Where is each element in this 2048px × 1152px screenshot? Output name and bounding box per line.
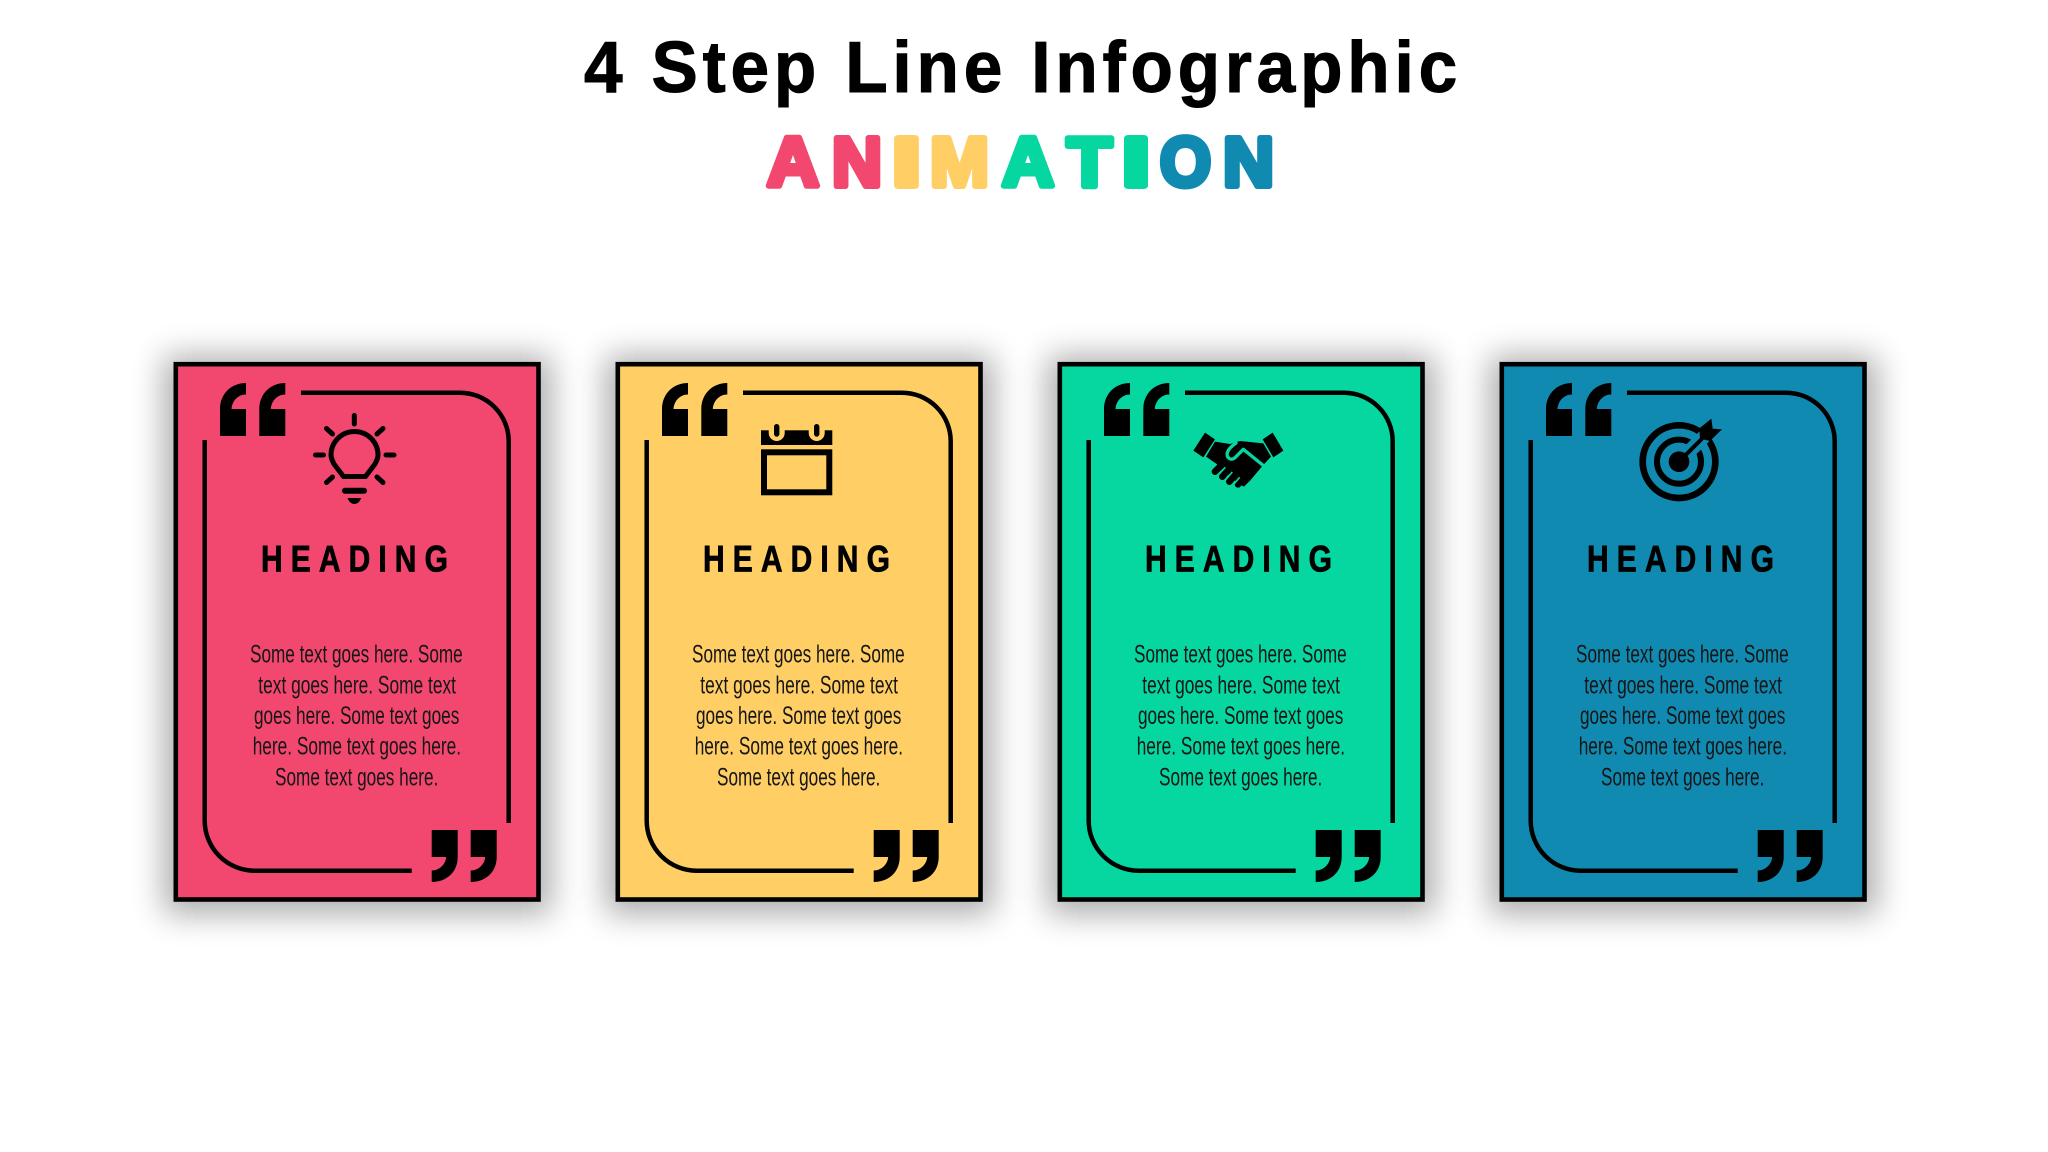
body text: Some text goes here. Some (1134, 641, 1347, 669)
body text: here. Some text goes here. (695, 733, 903, 761)
subtitle: animation (767, 123, 1274, 201)
body text (1576, 641, 1789, 792)
subtitle: animation: A (1002, 123, 1054, 201)
body text: Some text goes here. (275, 764, 438, 792)
body text: text goes here. Some text (1142, 671, 1340, 699)
body text: Some text goes here. Some (692, 641, 905, 669)
icon: opening quote (1546, 383, 1611, 436)
body text: text goes here. Some text (700, 671, 898, 699)
body text: Some text goes here. Some (1576, 641, 1789, 669)
panel: step 2 yellow (606, 356, 993, 914)
heading: HEADING (1145, 538, 1340, 580)
body text: Some text goes here. (1159, 764, 1322, 792)
panel: step 4 blue (1490, 356, 1877, 914)
body text: goes here. Some text goes (1138, 702, 1343, 730)
subtitle: animation: I (1122, 123, 1150, 201)
body text: goes here. Some text goes (696, 702, 901, 730)
icon: calendar (761, 424, 832, 492)
icon: light bulb (316, 416, 394, 504)
icon: opening quote (662, 383, 727, 436)
body text: Some text goes here. (1601, 764, 1764, 792)
subtitle: animation: O (1160, 123, 1211, 201)
body text: Some text goes here. Some (250, 641, 463, 669)
icon: closing quote (1758, 830, 1823, 882)
body text (250, 641, 463, 792)
title: 4 Step Line Infographic (584, 28, 1462, 108)
body text (1134, 641, 1347, 792)
body text: text goes here. Some text (258, 671, 456, 699)
body text (692, 641, 905, 792)
body text: goes here. Some text goes (254, 702, 459, 730)
subtitle: animation: I (892, 123, 922, 201)
heading: HEADING (261, 538, 456, 580)
subtitle: animation: M (930, 123, 989, 201)
icon: closing quote (432, 830, 497, 882)
body text: text goes here. Some text (1584, 671, 1782, 699)
heading: HEADING (703, 538, 898, 580)
panel: step 1 pink (164, 356, 551, 914)
body text: here. Some text goes here. (1137, 733, 1345, 761)
icon: target with arrow (1643, 419, 1722, 498)
subtitle: animation: T (1067, 123, 1112, 201)
subtitle: animation: N (832, 123, 882, 201)
body text: goes here. Some text goes (1580, 702, 1785, 730)
subtitle: animation: N (1223, 123, 1274, 201)
icon: closing quote (1316, 830, 1381, 882)
icon: handshake (1193, 433, 1283, 487)
heading: HEADING (1587, 538, 1782, 580)
icon: closing quote (874, 830, 939, 882)
body text: here. Some text goes here. (253, 733, 461, 761)
subtitle: animation: A (767, 123, 819, 201)
icon: opening quote (1104, 383, 1169, 436)
icon: opening quote (220, 383, 285, 436)
body text: Some text goes here. (717, 764, 880, 792)
panel: step 3 green (1048, 356, 1435, 914)
body text: here. Some text goes here. (1579, 733, 1787, 761)
